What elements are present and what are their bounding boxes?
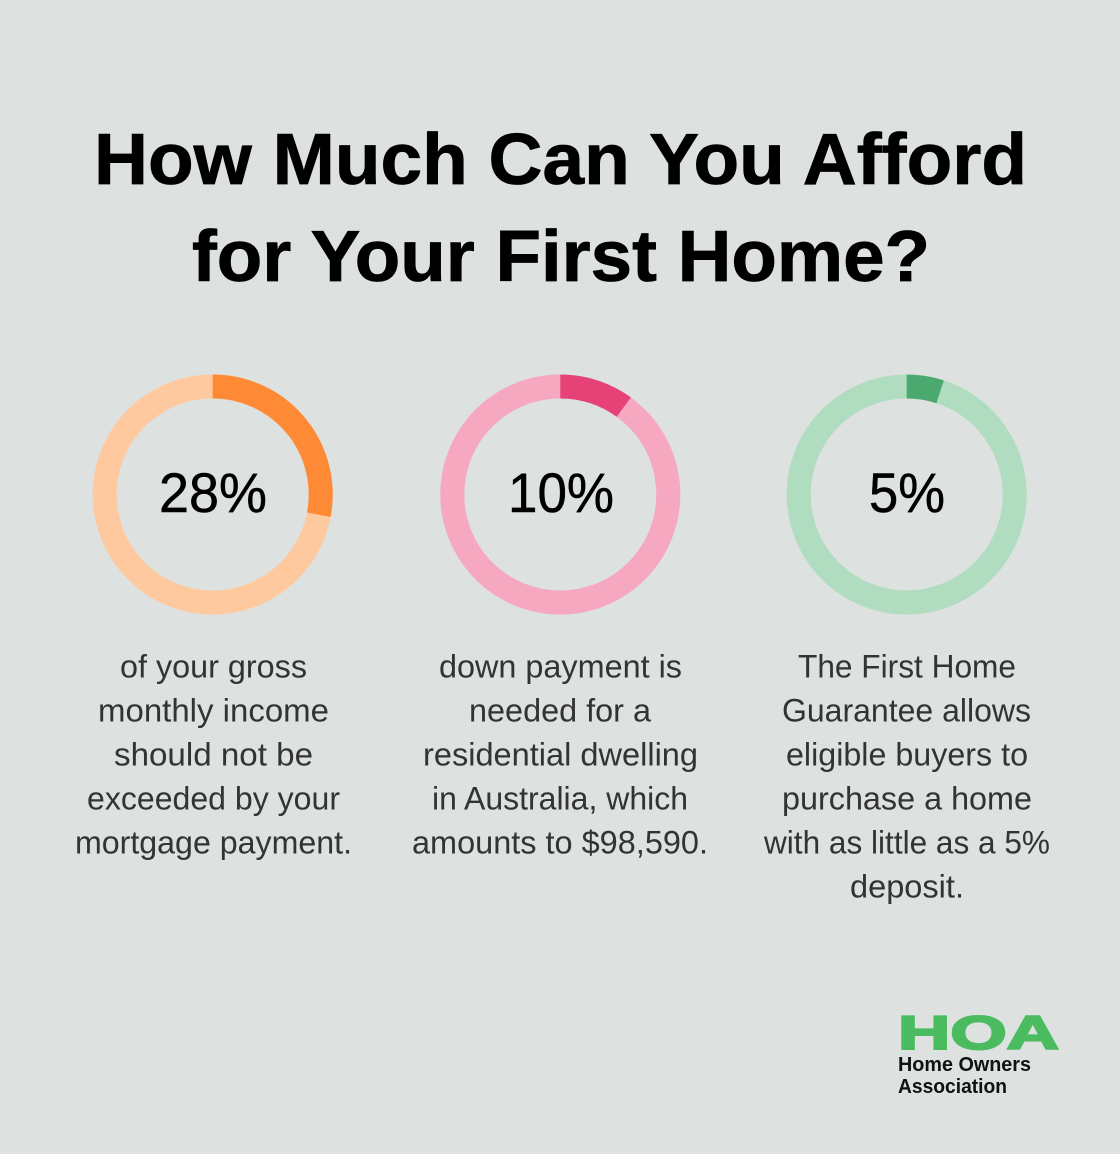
text block: guarantee description: The First Home bbox=[798, 648, 1016, 684]
text block: income description: of your gross bbox=[120, 648, 307, 684]
text block: guarantee description: deposit. bbox=[850, 868, 964, 904]
donut chart: 5% bbox=[799, 386, 1015, 602]
text block: guarantee description: purchase a home bbox=[782, 780, 1032, 816]
text block: income description: monthly income bbox=[98, 692, 329, 728]
value: 5%: 5% bbox=[869, 461, 945, 524]
text block: guarantee description: Guarantee allows bbox=[782, 692, 1031, 728]
donut chart: 28% bbox=[105, 386, 321, 602]
logo: HOA Home Owners Association bbox=[898, 1006, 1059, 1098]
value: 28%: 28% bbox=[159, 461, 267, 524]
value: 10%: 10% bbox=[508, 461, 614, 524]
text block: guarantee description: eligible buyers to bbox=[786, 736, 1028, 772]
panel: 10% down payment bbox=[412, 386, 708, 860]
text block: income description: mortgage payment. bbox=[75, 824, 352, 860]
donut chart: 10% bbox=[452, 386, 668, 602]
text block: down payment description bbox=[412, 648, 708, 860]
title: How Much Can You Afford bbox=[94, 120, 1027, 200]
panel: 5% First Home Guarantee bbox=[763, 386, 1050, 904]
text block: income description: exceeded by your bbox=[87, 780, 340, 816]
logo: HOA Home Owners Association: Association bbox=[898, 1076, 1007, 1098]
title bbox=[94, 120, 1027, 297]
logo: HOA Home Owners Association: HOA bbox=[898, 1006, 1059, 1059]
panel: 28% income bbox=[75, 386, 352, 860]
logo: HOA Home Owners Association: Home Owners bbox=[898, 1054, 1031, 1076]
title: for Your First Home? bbox=[192, 217, 930, 297]
text block: down payment description: needed for a bbox=[469, 692, 651, 728]
text block: down payment description: in Australia, which bbox=[432, 780, 688, 816]
text block: down payment description: amounts to $98,590. bbox=[412, 824, 708, 860]
text block: down payment description: residential dwelling bbox=[423, 736, 698, 772]
text block: income description bbox=[75, 648, 352, 860]
text block: guarantee description: with as little as a 5% bbox=[763, 824, 1050, 860]
text block: income description: should not be bbox=[114, 736, 313, 772]
text block: guarantee description bbox=[763, 648, 1050, 904]
text block: down payment description: down payment is bbox=[439, 648, 682, 684]
